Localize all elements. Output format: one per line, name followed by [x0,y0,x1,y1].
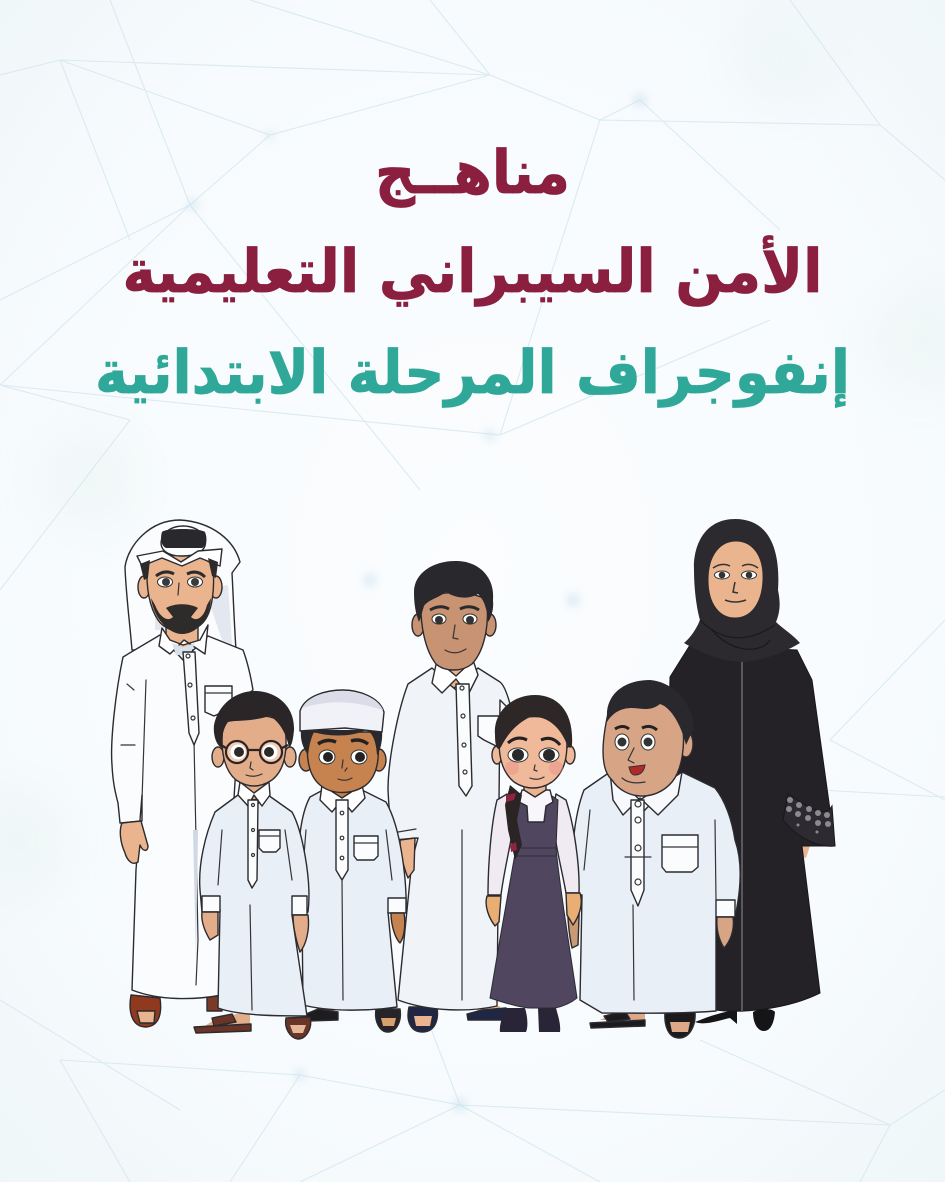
blouse sleeves [488,794,579,895]
ear [679,731,693,757]
hijab [684,519,800,662]
thobe [572,772,740,1013]
mouth [629,765,645,775]
thobe [298,790,406,1010]
collar [432,660,478,695]
cap [300,690,384,732]
character: girl [486,695,581,1032]
hand [717,917,733,948]
eyes [615,734,629,750]
eyes [158,577,172,587]
character: chubby boy [568,680,740,1038]
hands [486,893,581,926]
sandal [130,995,161,1027]
title line 2: الأمن السيبراني التعليمية [122,235,822,307]
thobe [388,668,512,1010]
heels [695,1009,775,1031]
neck [166,620,198,650]
glasses [226,741,248,763]
eyes [319,750,335,764]
pocket [205,686,232,716]
abaya [668,645,835,1011]
hair [214,691,294,748]
placket [456,684,472,796]
collar [159,625,208,654]
hair [607,680,694,745]
character: mother [668,519,835,1031]
placket [336,800,348,880]
beard [151,598,211,634]
hair [495,695,572,749]
pocket [259,830,280,852]
agal and headband [161,526,206,556]
title [95,138,850,408]
eyes [714,571,730,579]
thobe [200,795,309,1016]
sandals [205,1014,250,1026]
shoes [500,1008,560,1032]
placket [183,652,199,745]
character: boy with cap [298,690,406,1032]
character: boy with glasses [194,691,311,1039]
ghutra [125,520,240,650]
dress [490,792,577,1008]
face [708,541,763,618]
sandals [600,1010,645,1020]
eyes [432,614,446,624]
braid [505,785,522,860]
blouse front [519,790,553,822]
head [412,614,424,636]
sleeve cuff [783,794,835,846]
ears and face [492,746,502,764]
placket [248,800,258,888]
pocket [478,716,500,748]
hands [202,912,218,940]
ears and face [138,576,150,598]
mother hand [798,838,811,858]
sandals [408,1007,437,1032]
thobe [112,635,253,999]
character: father [112,520,253,1027]
placket [631,800,644,906]
title line 1: مناهــج [375,138,570,208]
collar [320,785,365,812]
sandals [318,1004,334,1012]
subtitle: إنفوجراف المرحلة الابتدائية [95,338,850,408]
hand [400,838,415,878]
collar [610,772,682,815]
eyes [508,748,528,762]
hair [414,561,493,622]
family illustration [112,519,835,1039]
hidden hand [568,890,580,948]
ears and face [212,747,224,767]
hand [120,821,148,863]
ears and face [299,749,313,771]
pocket [662,835,698,872]
collar [238,782,270,806]
cuffs [388,898,406,913]
character: tall boy [388,561,512,1032]
pocket [354,836,378,860]
hands [391,913,405,943]
face [603,699,684,796]
cuffs [202,896,220,912]
